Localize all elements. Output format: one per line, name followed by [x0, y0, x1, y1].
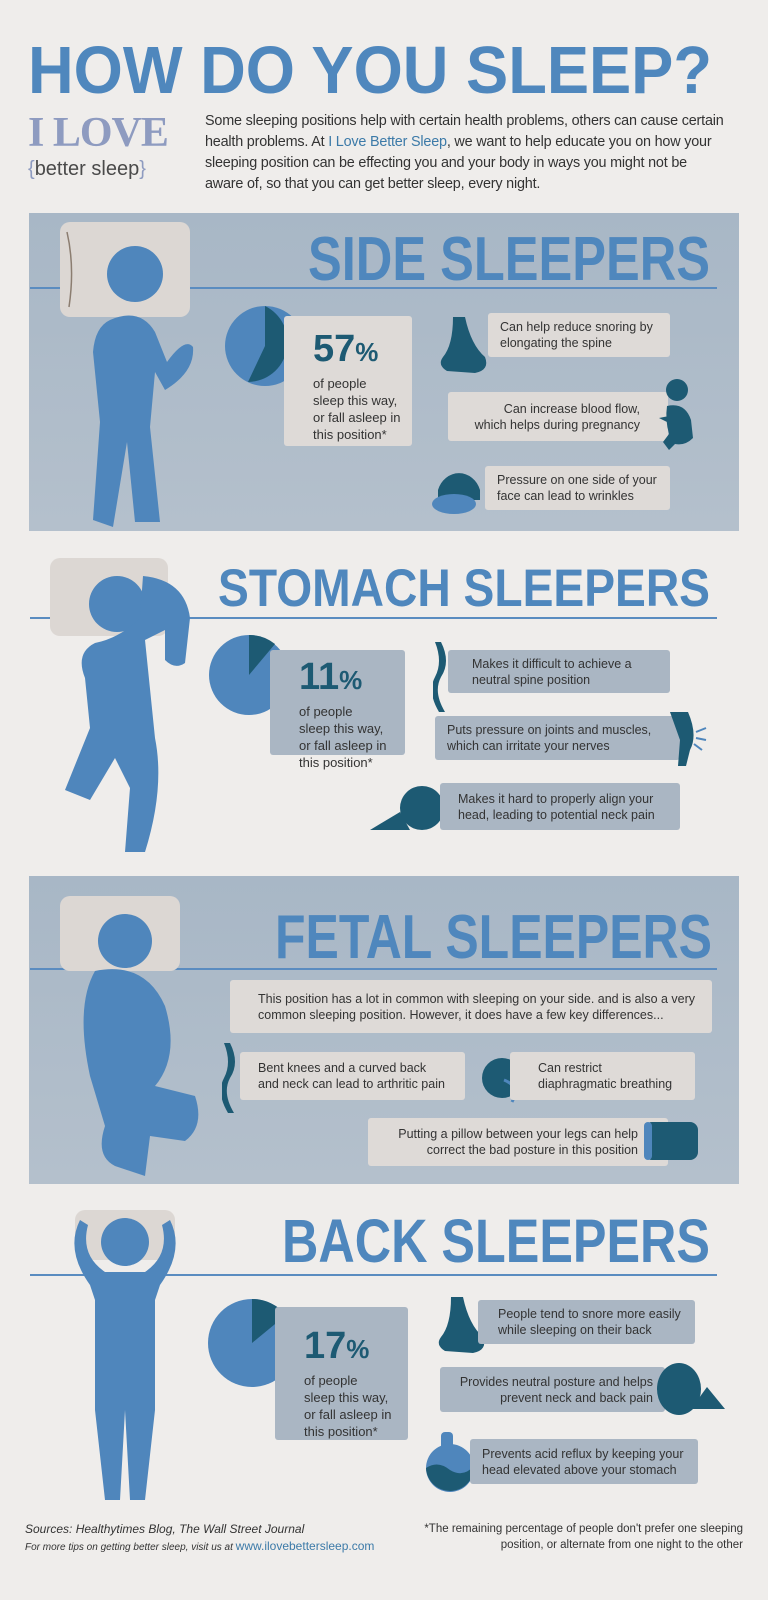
pie chart 17%	[208, 1299, 278, 1387]
callout: pillow: correct the bad posture in this position	[427, 1143, 638, 1157]
stat: 17%: or fall asleep in	[304, 1407, 391, 1422]
callout: joints: Puts pressure on joints and muscles,	[447, 723, 651, 737]
footer: sources: For more tips on getting better sleep, visit us at www.ilovebettersleep.com	[25, 1539, 374, 1553]
callout: neutral posture: prevent neck and back pain	[500, 1390, 653, 1404]
icon: joint	[670, 712, 706, 766]
stat: 17%	[275, 1307, 408, 1440]
icon: head neck	[370, 786, 440, 830]
callout: pillow	[368, 1118, 668, 1166]
footer: sources: Sources: Healthytimes Blog, The Wall Street Journal	[25, 1522, 304, 1536]
stat: 57%: sleep this way,	[313, 393, 397, 408]
callout: snoring: elongating the spine	[500, 336, 612, 350]
text block: fetal intro: common sleeping position. However, it does have a few key differences...	[258, 1008, 664, 1022]
callout: blood flow	[448, 392, 668, 441]
callout: neck pain: Makes it hard to properly align your	[458, 792, 653, 806]
pie chart 57%	[225, 306, 292, 386]
pie chart 11%	[209, 635, 280, 715]
callout: snoring: Can help reduce snoring by	[500, 320, 653, 334]
intro text: health problems. At I Love Better Sleep, we want to help educate you on how your	[205, 134, 711, 150]
callout: wrinkles	[485, 466, 670, 510]
stat: 11%: 11%	[299, 656, 362, 698]
callout: breathing: Can restrict	[538, 1061, 602, 1075]
callout: acid reflux: head elevated above your stomach	[482, 1462, 677, 1476]
stat: 11%: sleep this way,	[299, 721, 383, 736]
icon: pillow	[644, 1122, 698, 1160]
text block: fetal intro: This position has a lot in common with sleeping on your side. and is also a very	[258, 992, 695, 1006]
stat: 57%: 57%	[313, 328, 378, 370]
figure: fetal sleeper	[60, 896, 198, 1176]
panel: side sleepers	[29, 213, 739, 531]
callout: blood flow: which helps during pregnancy	[475, 418, 640, 432]
stat: 11%	[270, 650, 405, 755]
figure: back sleeper	[74, 1210, 176, 1500]
stat: 57%: this position*	[313, 427, 387, 442]
stat: 17%: this position*	[304, 1424, 378, 1439]
intro text: aware of, so that you can get better sleep, every night.	[205, 176, 540, 192]
callout: arthritic pain: Bent knees and a curved back	[258, 1061, 426, 1075]
icon: stomach	[426, 1432, 470, 1492]
stat: 11%: of people	[299, 704, 352, 719]
callout: wrinkles: face can lead to wrinkles	[497, 489, 634, 503]
stat: 57%: of people	[313, 376, 366, 391]
figure: stomach sleeper	[50, 558, 190, 852]
callout: blood flow: Can increase blood flow,	[504, 402, 640, 416]
callout: arthritic pain	[240, 1052, 465, 1100]
callout: neutral posture: Provides neutral posture and helps	[460, 1374, 653, 1388]
section: stomach sleepers: this position*	[299, 755, 373, 770]
callout: neck pain	[440, 783, 680, 830]
intro text: sleeping position can be effecting you and your body in ways you might not be	[205, 155, 687, 171]
callout: neck pain: head, leading to potential neck pain	[458, 808, 655, 822]
panel: fetal sleepers	[29, 876, 739, 1184]
icon: baby	[659, 379, 693, 450]
callout: wrinkles: Pressure on one side of your	[497, 473, 657, 487]
stat: 17%: sleep this way,	[304, 1390, 388, 1405]
callout: breathing	[510, 1052, 695, 1100]
callout: breathing: diaphragmatic breathing	[538, 1077, 672, 1091]
callout: neutral spine: Makes it difficult to achieve a	[472, 656, 632, 670]
icon: spine	[433, 642, 446, 712]
intro text	[205, 113, 724, 192]
callout: arthritic pain: and neck can lead to arthritic pain	[258, 1077, 445, 1091]
callout: neutral spine: neutral spine position	[472, 672, 590, 686]
callout: snoring	[488, 313, 670, 357]
callout: acid reflux: Prevents acid reflux by keeping your	[482, 1446, 684, 1460]
stat: 11%: or fall asleep in	[299, 738, 386, 753]
icon: head on pillow	[657, 1363, 725, 1415]
callout: neutral posture	[440, 1367, 665, 1412]
icon: curved spine	[222, 1043, 235, 1113]
icon: nose	[440, 317, 486, 373]
text block: fetal intro	[230, 980, 712, 1033]
stat: 57%	[284, 316, 412, 446]
figure: side sleeper	[60, 222, 194, 527]
stat: 17%: 17%	[304, 1325, 369, 1367]
callout: pillow: Putting a pillow between your legs can help	[398, 1127, 638, 1141]
callout: snore: while sleeping on their back	[498, 1323, 652, 1337]
callout: acid reflux	[470, 1439, 698, 1484]
intro text: Some sleeping positions help with certain health problems, others can cause certain	[205, 113, 724, 129]
icon: nose	[438, 1297, 484, 1353]
callout: snore: People tend to snore more easily	[498, 1307, 681, 1321]
callout: joints	[435, 716, 680, 760]
callout: neutral spine	[448, 650, 670, 693]
footer: sources	[25, 1522, 374, 1553]
icon: breathing	[482, 1058, 514, 1102]
callout: snore	[478, 1300, 695, 1344]
section: back sleepers	[30, 1210, 725, 1500]
stat: 17%: of people	[304, 1373, 358, 1388]
footnote: *The remaining percentage of people don't prefer one sleeping position, or alternate from one night to the other	[424, 1523, 743, 1551]
logo	[28, 110, 168, 180]
stat: 57%: or fall asleep in	[313, 410, 400, 425]
callout: joints: which can irritate your nerves	[447, 739, 610, 753]
logo: I LOVE	[28, 110, 168, 156]
section: stomach sleepers	[30, 558, 717, 852]
logo: {better sleep}	[28, 158, 146, 180]
icon: face pillow	[432, 473, 480, 514]
